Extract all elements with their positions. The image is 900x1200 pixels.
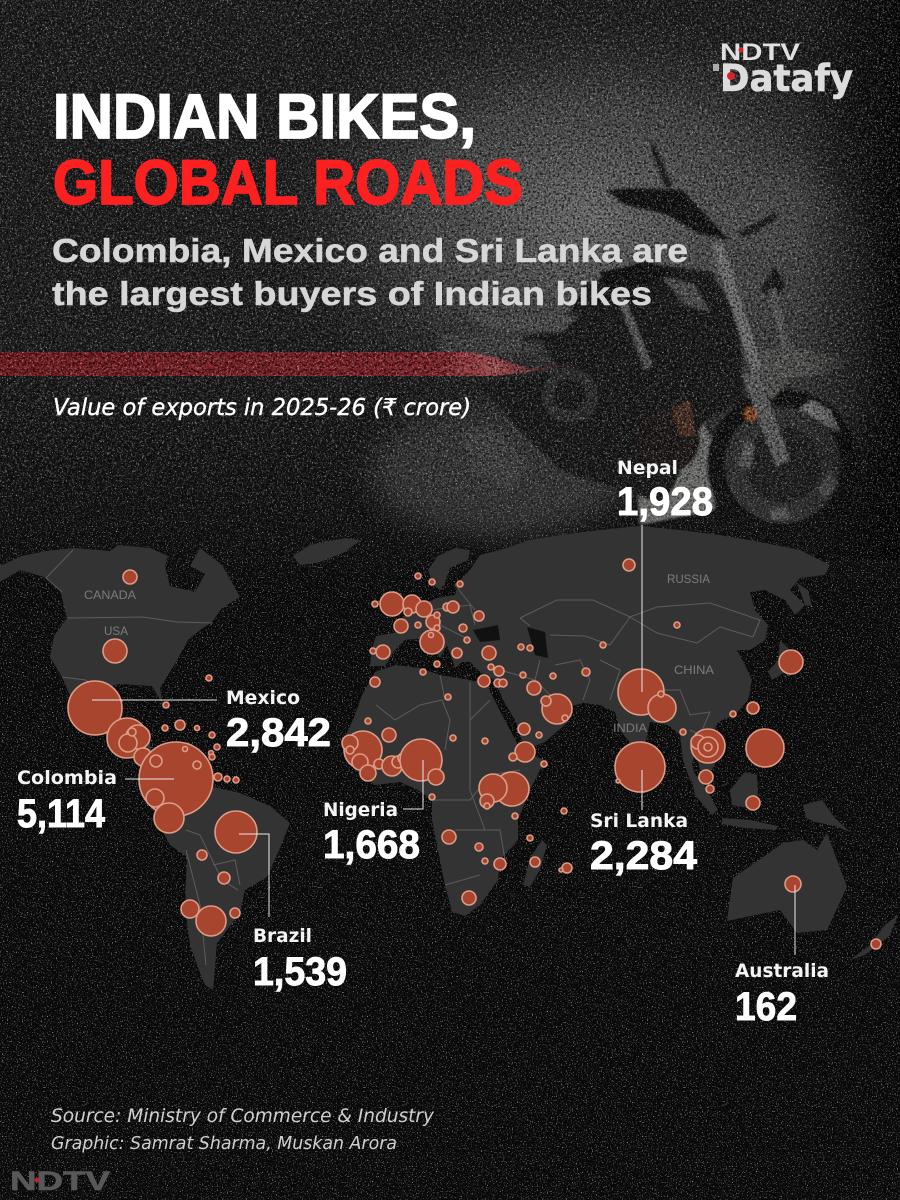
- source and credits: [51, 1105, 435, 1154]
- right mirror: [738, 212, 778, 238]
- title: INDIAN BIKES,: [53, 82, 476, 152]
- engine: [542, 367, 598, 423]
- export value bubbles: [68, 559, 881, 949]
- callout: Sri Lanka: 2,284: [590, 834, 698, 878]
- callout: Nigeria: 1,668: [323, 823, 420, 867]
- callout: Brazil: Brazil: [253, 925, 312, 947]
- callout: Brazil: 1,539: [253, 950, 347, 994]
- callout: Colombia: 5,114: [17, 792, 106, 836]
- rear body silhouette: [470, 262, 745, 505]
- subtitle: [52, 232, 688, 312]
- source and credits: Graphic: Samrat Sharma, Muskan Arora: [51, 1133, 397, 1154]
- country labels: CANADA: [84, 588, 136, 602]
- callout: Mexico: 2,842: [226, 711, 331, 755]
- frame tube: [618, 296, 652, 370]
- tank highlight: [660, 275, 710, 312]
- headlight: [716, 240, 782, 296]
- title: GLOBAL ROADS: [53, 148, 523, 218]
- front fork: [712, 242, 788, 450]
- landmasses: [0, 526, 898, 990]
- callout: Mexico: [226, 687, 331, 755]
- callout: Australia: [735, 960, 829, 1029]
- borders: [46, 550, 760, 965]
- country labels: INDIA: [613, 721, 647, 735]
- country labels: [84, 572, 714, 735]
- indicator: [744, 407, 758, 421]
- callout: Mexico: Mexico: [226, 687, 300, 709]
- right edge vignette: [800, 0, 900, 560]
- logo: NDTV Datafy: NDTV: [720, 39, 800, 66]
- handlebar: [606, 188, 730, 240]
- callout: Sri Lanka: Sri Lanka: [590, 810, 688, 832]
- callout: Australia: 162: [735, 985, 797, 1029]
- front fender: [760, 348, 852, 400]
- callout: Colombia: Colombia: [17, 767, 117, 789]
- rear panel: [440, 335, 530, 360]
- country labels: CHINA: [674, 663, 714, 677]
- callout: Nigeria: [323, 799, 420, 867]
- fork bottom: [742, 368, 790, 466]
- footer logo: NDTV: NDTV: [10, 1166, 110, 1196]
- callout: Nepal: 1,928: [617, 480, 713, 524]
- title: [53, 82, 523, 218]
- leader lines: [92, 525, 795, 955]
- callout: Nigeria: Nigeria: [323, 799, 398, 821]
- callout: Nepal: Nepal: [617, 457, 678, 479]
- inland seas: [473, 625, 548, 658]
- callout: Australia: Australia: [735, 960, 829, 982]
- motorcycle photo illustration: [440, 145, 859, 541]
- left mirror: [650, 145, 672, 188]
- country labels: USA: [104, 624, 128, 638]
- logo: NDTV Datafy: Datafy: [720, 57, 853, 100]
- road strip behind wheels: [630, 395, 715, 525]
- rear wheel: [636, 408, 700, 472]
- seat: [462, 310, 578, 332]
- callout: Nepal: [617, 457, 713, 524]
- chart caption: Value of exports in 2025-26 (₹ crore): [53, 395, 471, 421]
- logo: NDTV Datafy: [713, 39, 853, 100]
- exhaust: [462, 425, 530, 490]
- callout: Colombia: [17, 767, 117, 836]
- tyre track: [0, 352, 580, 376]
- world map: [0, 526, 898, 990]
- source and credits: Source: Ministry of Commerce & Industry: [51, 1105, 435, 1127]
- callout: Sri Lanka: [590, 810, 698, 878]
- country labels: RUSSIA: [667, 572, 710, 586]
- subtitle: Colombia, Mexico and Sri Lanka are: [52, 232, 688, 269]
- subtitle: the largest buyers of Indian bikes: [52, 275, 652, 312]
- callout: Brazil: [253, 925, 347, 994]
- front wheel: [707, 389, 859, 541]
